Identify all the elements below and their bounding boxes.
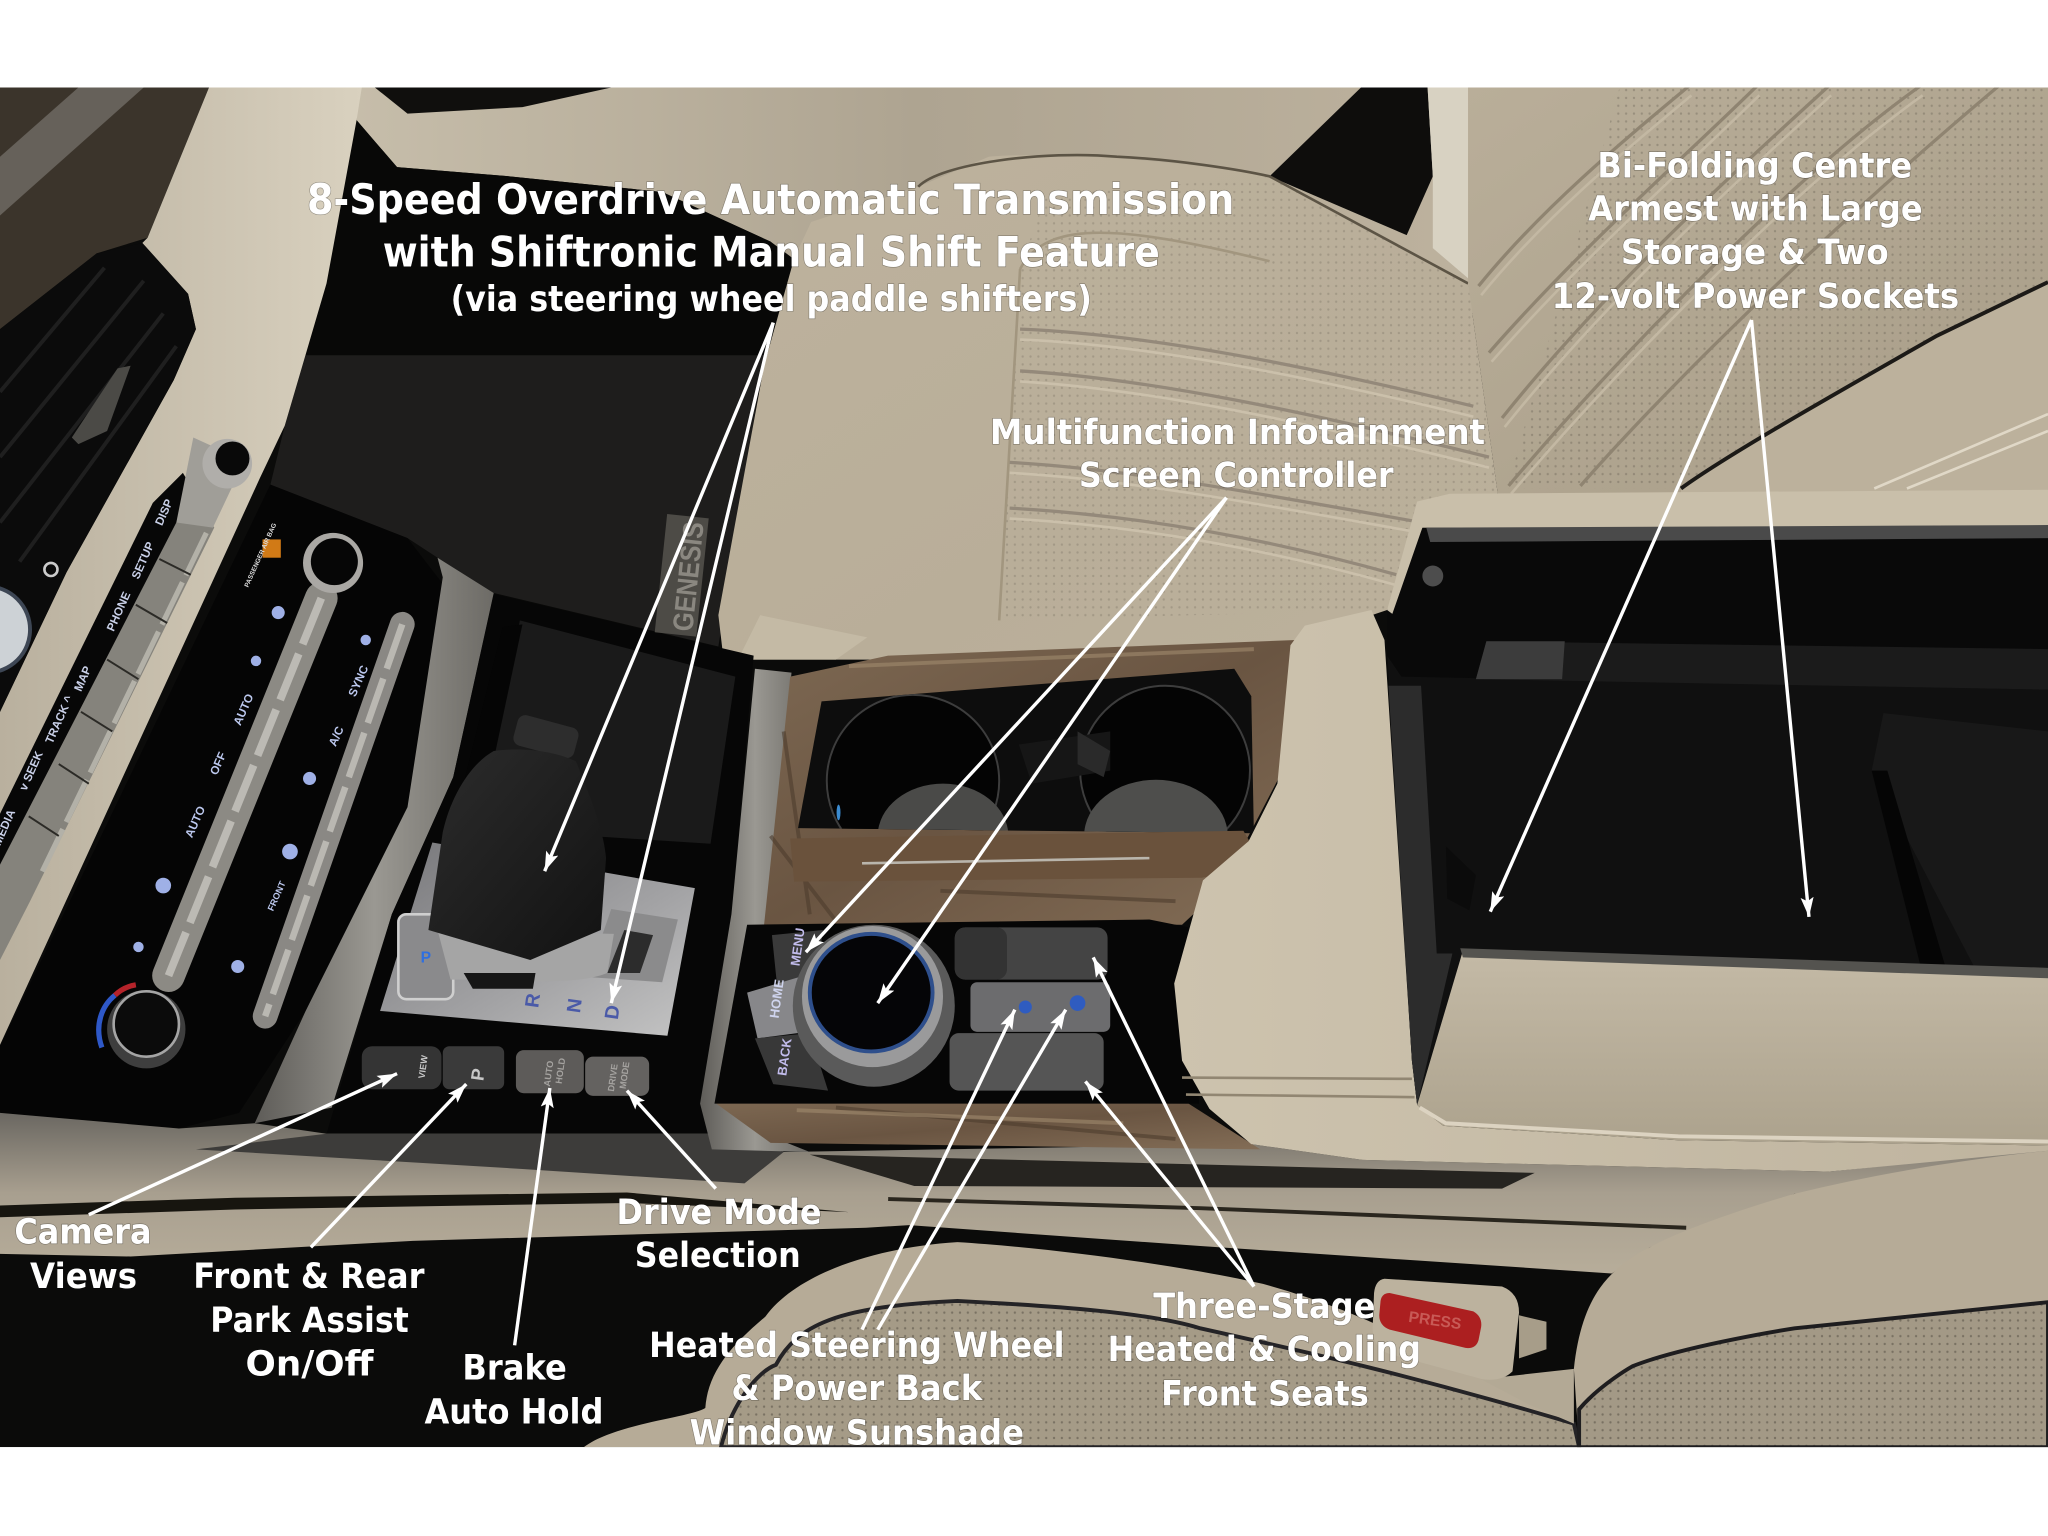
- driver seat bottom: [1574, 1151, 2048, 1447]
- label: heated steering wheel and sunshade: Heated Steering Wheel: [649, 1326, 1064, 1366]
- floor mat with GENESIS badge: GENESIS: [667, 520, 711, 633]
- label: drive mode: Selection: [635, 1236, 801, 1276]
- button row below shifter: [362, 1046, 649, 1096]
- climate control panel: AUTO: [183, 804, 208, 840]
- gear shift knob: [428, 750, 606, 960]
- gear selector gate: R: [521, 992, 545, 1009]
- instrument cluster edge and media strip: DISP: [153, 497, 176, 528]
- instrument cluster edge and media strip: [0, 438, 252, 960]
- arrows: transmission: [545, 323, 773, 1003]
- label: heated steering wheel and sunshade: [649, 1326, 1064, 1454]
- arrows: armrest storage: [1490, 320, 1809, 917]
- floor mat with GENESIS badge: [270, 120, 797, 653]
- label: heated and cooled seats: Front Seats: [1161, 1374, 1369, 1414]
- label: heated and cooled seats: Three-Stage: [1153, 1287, 1375, 1327]
- climate control panel: A/C: [327, 724, 347, 748]
- label: heated steering wheel and sunshade: & Power Back: [731, 1369, 983, 1409]
- dashboard beige trim: [0, 88, 362, 1045]
- arrow: brake auto hold: [515, 1088, 550, 1345]
- air vent: [0, 243, 196, 712]
- driver seat backrest: [1468, 86, 2048, 496]
- infotainment control panel: MENU: [787, 927, 808, 967]
- silver strip by console: [700, 669, 810, 1152]
- label: bi-folding centre armrest: Armest with Large: [1588, 190, 1923, 230]
- label: transmission: [307, 175, 1234, 320]
- button row below shifter: MODE: [618, 1061, 631, 1090]
- wood trim: [714, 640, 1296, 1149]
- label: bi-folding centre armrest: 12-volt Power Sockets: [1552, 277, 1959, 317]
- label: camera views: Views: [30, 1257, 137, 1297]
- label: bi-folding centre armrest: [1552, 147, 1959, 317]
- climate control panel: FRONT: [266, 879, 288, 912]
- gear selector gate: P: [421, 950, 431, 967]
- instrument cluster edge and media strip: TRACK ^: [43, 693, 76, 746]
- door sill and rear door: [357, 88, 1476, 313]
- gear selector gate: N: [563, 997, 587, 1014]
- rotary controller knob: [793, 925, 955, 1087]
- label: bi-folding centre armrest: Storage & Two: [1621, 233, 1889, 273]
- climate control panel: AUTO: [231, 692, 257, 727]
- left padded armrest: [1174, 610, 2048, 1172]
- storage lid: [1417, 948, 2048, 1145]
- label: transmission: with Shiftronic Manual Shift Feature: [383, 227, 1160, 276]
- button row below shifter: AUTO: [542, 1060, 555, 1087]
- infotainment control panel: HOME: [767, 978, 787, 1019]
- label: transmission: 8-Speed Overdrive Automatic Transmission: [307, 175, 1234, 224]
- label: park assist: Park Assist: [210, 1301, 409, 1341]
- infotainment control panel: BACK: [774, 1037, 795, 1077]
- dashboard wood and grey trim corner: [0, 88, 209, 329]
- arrow: drive mode: [627, 1091, 716, 1189]
- shifter bezel: [386, 616, 754, 934]
- passenger seat cushion: [718, 155, 1498, 660]
- button row below shifter: P: [466, 1067, 489, 1082]
- label: infotainment controller: Screen Controller: [1079, 456, 1394, 496]
- button row below shifter: VIEW: [417, 1054, 430, 1079]
- label: brake auto hold: Brake: [462, 1348, 567, 1388]
- storage compartment: [1387, 490, 2048, 1105]
- label: bi-folding centre armrest: Bi-Folding Centre: [1597, 147, 1912, 187]
- instrument cluster edge and media strip: v SEEK: [17, 749, 46, 793]
- label: brake auto hold: Auto Hold: [424, 1393, 603, 1433]
- infotainment control panel: [714, 920, 1199, 1104]
- seat belt buckle: PRESS: [1407, 1309, 1462, 1333]
- label: brake auto hold: [424, 1348, 603, 1433]
- label: heated steering wheel and sunshade: Window Sunshade: [690, 1414, 1024, 1454]
- label: heated and cooled seats: [1108, 1287, 1421, 1414]
- label: park assist: On/Off: [246, 1344, 375, 1384]
- instrument cluster edge and media strip: PHONE: [104, 590, 133, 633]
- climate control panel: OFF: [208, 750, 229, 777]
- label: drive mode: Drive Mode: [616, 1193, 822, 1233]
- cup holder wood bar: [790, 831, 1254, 882]
- cup holders: [798, 668, 1254, 834]
- button row below shifter: HOLD: [554, 1057, 567, 1084]
- label: infotainment controller: [990, 413, 1485, 496]
- arrow: camera views: [89, 1074, 397, 1215]
- climate control panel: [96, 486, 415, 1068]
- seat belt buckle: [1373, 1279, 1574, 1424]
- brushed silver band: [255, 558, 494, 1123]
- label: park assist: [193, 1257, 424, 1384]
- label: camera views: [14, 1212, 152, 1297]
- arrows: heated and cooled seats: [1085, 957, 1254, 1287]
- label: heated and cooled seats: Heated & Cooling: [1108, 1330, 1421, 1370]
- gear selector gate: D: [601, 1004, 625, 1021]
- climate control panel: PASSENGER AIR BAG: [244, 522, 278, 589]
- instrument cluster edge and media strip: MAP: [72, 664, 94, 693]
- lower dash band: [0, 1113, 2048, 1273]
- label: park assist: Front & Rear: [193, 1257, 424, 1297]
- label: camera views: Camera: [14, 1212, 152, 1252]
- passenger seat bottom: [584, 1242, 1579, 1447]
- label: infotainment controller: Multifunction Infotainment: [990, 413, 1485, 453]
- gear selector gate: [380, 842, 695, 1036]
- label: transmission: (via steering wheel paddle shifters): [451, 279, 1092, 320]
- arrow: park assist: [311, 1084, 466, 1247]
- climate control panel: SYNC: [346, 663, 371, 699]
- instrument cluster edge and media strip: SETUP: [129, 540, 157, 581]
- arrows: infotainment controller: [806, 498, 1226, 1003]
- button row below shifter: DRIVE: [606, 1063, 620, 1092]
- arrows: heated steering wheel and sunshade: [862, 1010, 1066, 1330]
- label: drive mode: [616, 1193, 822, 1276]
